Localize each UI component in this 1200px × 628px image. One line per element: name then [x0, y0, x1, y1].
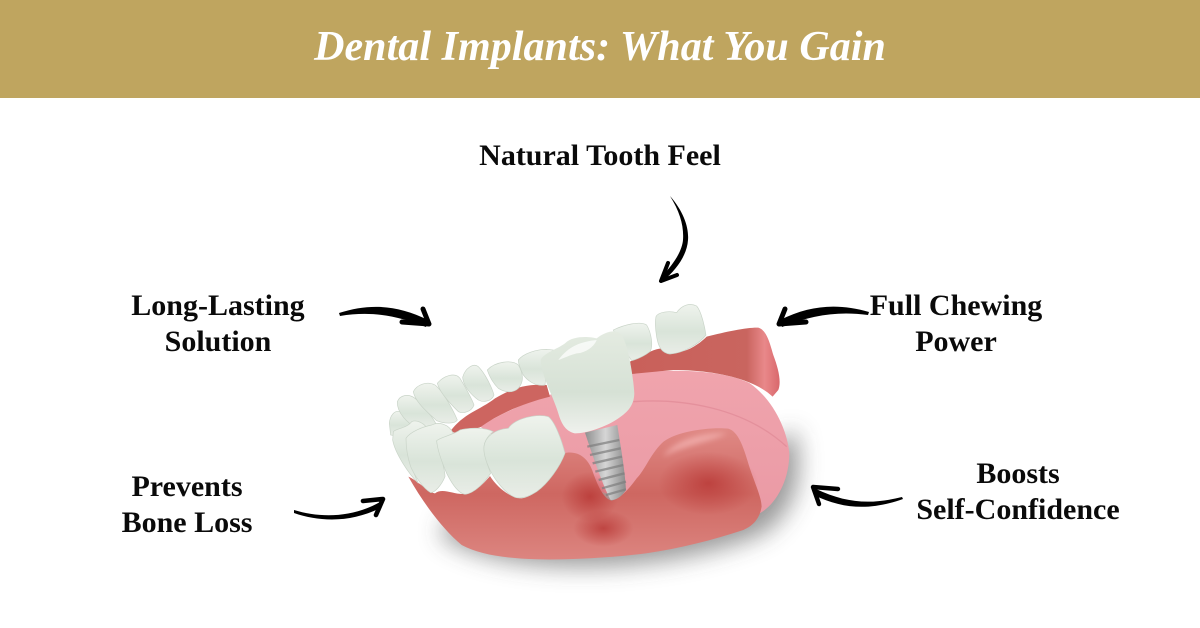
label: full chewing power: Full Chewing [870, 289, 1042, 322]
back gum left [450, 385, 550, 433]
back gum right [630, 328, 780, 397]
tongue fold [633, 401, 787, 447]
gum shading near implant [562, 472, 618, 522]
arrow: natural tooth feel [661, 196, 688, 281]
label: full chewing power: Power [915, 325, 997, 358]
label: prevents bone loss [122, 470, 252, 539]
arrow: prevents bone loss [294, 499, 383, 519]
label: boosts self-confidence: Self-Confidence [916, 493, 1120, 526]
gum highlight [663, 433, 727, 457]
tongue and mouth floor [480, 371, 789, 513]
label: long-lasting solution [131, 289, 305, 358]
arrow: long-lasting solution [339, 307, 429, 327]
implant threads [587, 440, 626, 495]
gum shading valley [573, 510, 633, 547]
label: prevents bone loss: Prevents [131, 470, 243, 503]
arrow: full chewing power [779, 307, 869, 327]
label: natural tooth feel: Natural Tooth Feel [479, 139, 721, 172]
label: full chewing power [870, 289, 1042, 358]
jaw shadow [440, 430, 799, 567]
implant post [585, 425, 626, 500]
label: boosts self-confidence: Boosts [976, 457, 1060, 490]
label: long-lasting solution: Solution [165, 325, 271, 358]
implant screw [585, 425, 626, 500]
front teeth row [393, 416, 565, 498]
arrow: boosts self-confidence [813, 487, 903, 507]
implant crown [541, 331, 634, 433]
crown occlusal highlight [558, 340, 597, 360]
header banner [0, 0, 1200, 98]
gum shading right [658, 452, 758, 515]
back teeth row [389, 305, 706, 437]
front gum [408, 428, 762, 559]
label: boosts self-confidence [916, 457, 1120, 526]
label: long-lasting solution: Long-Lasting [131, 289, 305, 322]
title: Dental Implants: What You Gain [314, 24, 886, 70]
label: prevents bone loss: Bone Loss [122, 506, 252, 539]
